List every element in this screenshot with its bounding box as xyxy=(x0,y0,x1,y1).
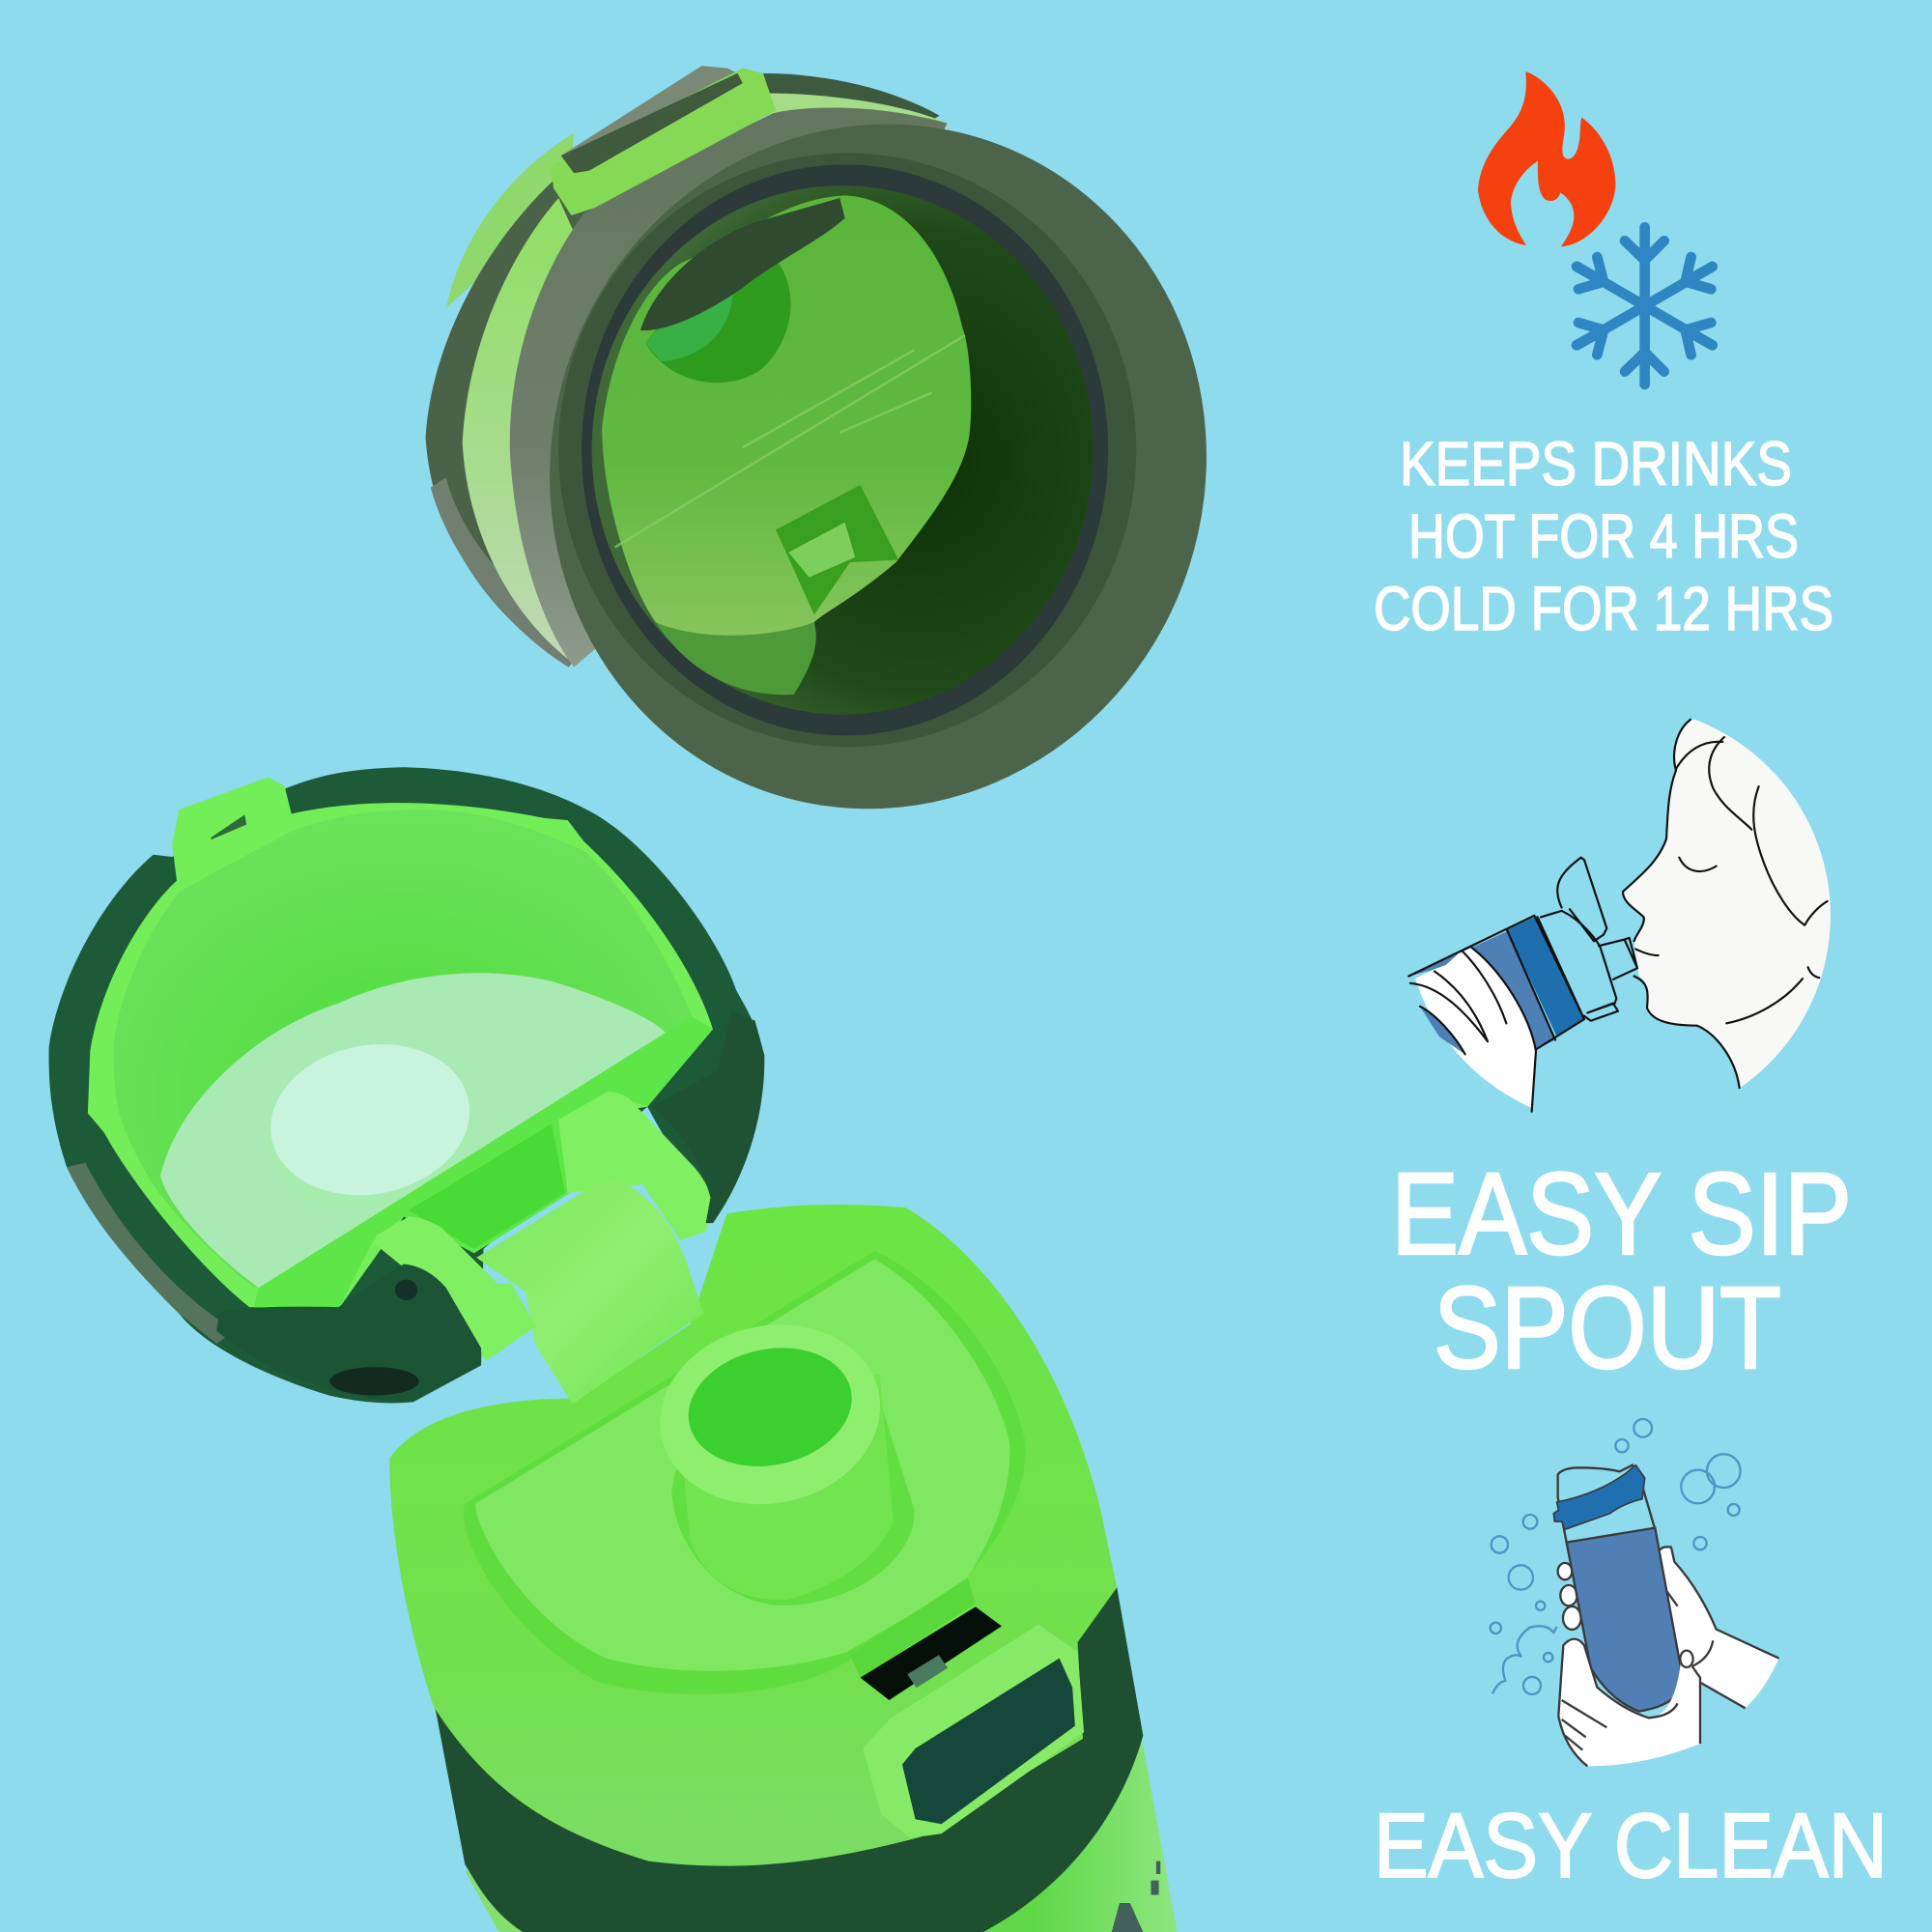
bottle body below band xyxy=(465,1732,1178,1932)
dark gasket band xyxy=(426,181,671,668)
open flip lid xyxy=(49,767,764,1404)
dome hole xyxy=(645,263,791,383)
icon: flame xyxy=(1478,71,1615,246)
heading: easy clean: EASY CLEAN xyxy=(1374,1795,1888,1897)
translucent seal xyxy=(160,973,666,1288)
tab slit xyxy=(561,73,743,173)
heading: easy sip spout: SPOUT xyxy=(1434,1262,1781,1393)
lid front wall xyxy=(254,1016,713,1309)
lid interior xyxy=(114,810,692,1288)
rear top band xyxy=(763,73,940,123)
right rim corner xyxy=(652,1012,764,1223)
rim xyxy=(485,65,1271,868)
heading: easy sip spout xyxy=(1391,1148,1852,1393)
dome xyxy=(602,195,971,636)
threaded ring xyxy=(558,153,1136,747)
bottle top outline xyxy=(1558,1465,1655,1543)
centre hinge barrel xyxy=(476,1180,703,1404)
tab slit xyxy=(211,814,246,839)
spout xyxy=(643,1305,915,1605)
icon: person sipping from bottle xyxy=(1407,719,1831,1113)
dark band xyxy=(426,1587,1143,1932)
icon outlines xyxy=(1408,720,1828,1112)
dark flap xyxy=(640,198,845,330)
back fingers xyxy=(1558,1563,1581,1630)
rear dome crescent xyxy=(446,133,574,308)
seal disc xyxy=(249,1024,489,1230)
green tab xyxy=(551,69,776,215)
right hand xyxy=(1659,1547,1779,1708)
dome ridges xyxy=(614,335,965,548)
bottle lid xyxy=(1553,1465,1645,1529)
inner wall xyxy=(592,185,1093,715)
icon: hands washing bottle xyxy=(1491,1419,1779,1766)
glass seal xyxy=(582,164,1108,735)
bottle medium blue xyxy=(1408,931,1555,1049)
light green band xyxy=(463,198,671,660)
rim underside xyxy=(67,1163,236,1344)
lid dark rim xyxy=(49,767,762,1403)
right hinge knuckle xyxy=(558,1092,712,1240)
soap bubbles xyxy=(1491,1419,1741,1694)
platform outer step xyxy=(464,1251,1026,1694)
printed marks xyxy=(1112,1861,1160,1932)
text: keeps drinks hot and cold xyxy=(1374,429,1833,643)
pivot hole xyxy=(329,1367,419,1396)
bottle dark blue xyxy=(1507,916,1584,1037)
left hinge knuckle xyxy=(376,1216,536,1361)
dome vent slot xyxy=(776,485,898,614)
raised platform xyxy=(475,1259,1009,1671)
left hand xyxy=(1558,1639,1700,1766)
thumb tip xyxy=(1680,1651,1693,1667)
heading: easy sip spout: EASY SIP xyxy=(1391,1148,1852,1279)
slot cover xyxy=(850,1577,976,1678)
cap silhouette xyxy=(389,1205,1117,1866)
bottle cap underside xyxy=(426,65,1271,868)
icon: snowflake xyxy=(1577,227,1713,384)
text: keeps drinks hot and cold: COLD FOR 12 HRS xyxy=(1374,574,1833,643)
hand xyxy=(1415,948,1535,1107)
low finger gap xyxy=(1420,1007,1465,1054)
grey band xyxy=(510,107,947,668)
lid inner border xyxy=(88,778,713,1309)
slider tab xyxy=(863,1625,1084,1838)
face xyxy=(1624,719,1831,1088)
bottle body xyxy=(1567,1528,1681,1712)
grey tab rear xyxy=(561,66,743,156)
text: keeps drinks hot and cold: HOT FOR 4 HRS xyxy=(1408,501,1799,571)
text: keeps drinks hot and cold: KEEPS DRINKS xyxy=(1400,429,1792,498)
slider button xyxy=(902,1659,1075,1824)
bottle with open spout xyxy=(389,1205,1178,1932)
lower inner reflection xyxy=(656,622,816,695)
lower rim corner xyxy=(216,1264,481,1402)
slot xyxy=(861,1606,1002,1700)
